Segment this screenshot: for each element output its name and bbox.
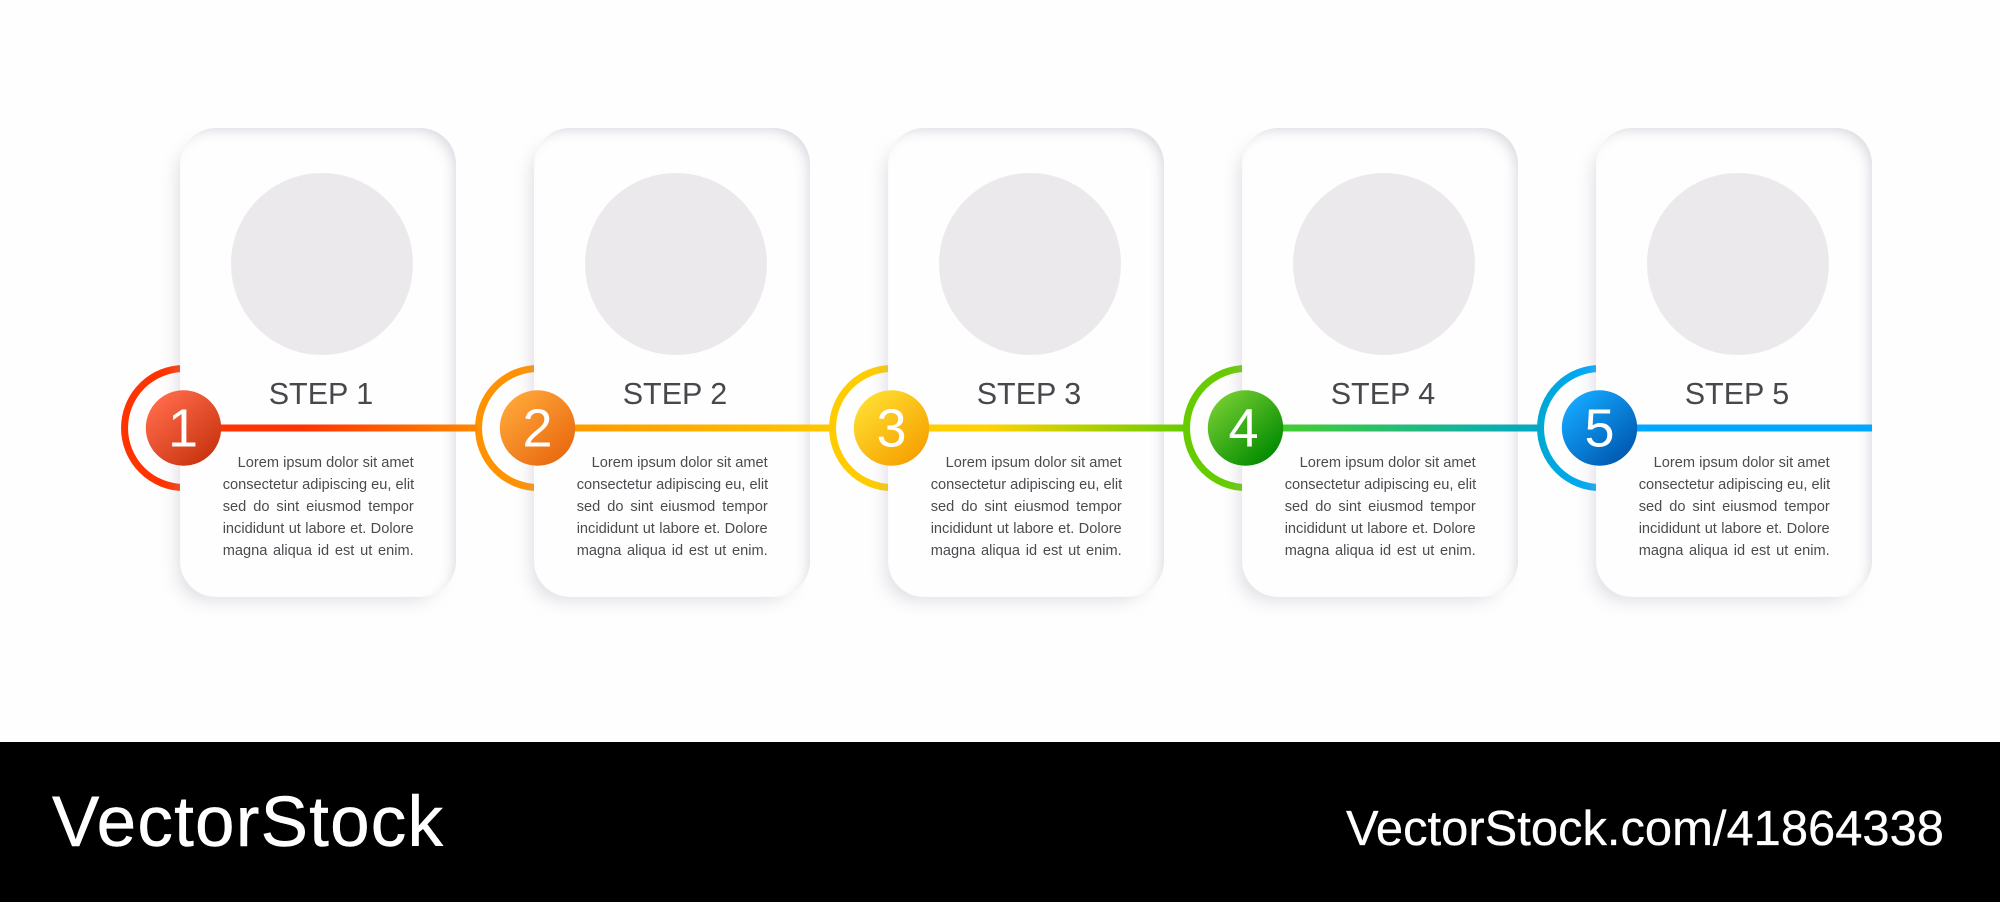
panel: step 2 card — [534, 128, 810, 597]
text block: step 4: incididunt ut labore et. Dolore — [1285, 521, 1476, 537]
text block: step 2 — [577, 454, 768, 559]
text block: step 5 — [1639, 454, 1830, 559]
text block: step 3 — [931, 454, 1122, 559]
text block: step 3: consectetur adipiscing eu, elit — [931, 477, 1122, 493]
text block: step 1: Lorem ipsum dolor sit amet — [238, 454, 414, 470]
marker 2 — [500, 390, 575, 466]
text block: step 5: magna aliqua id est ut enim. — [1639, 543, 1830, 559]
text block: step 5: Lorem ipsum dolor sit amet — [1654, 454, 1830, 470]
text block: step 5: sed do sint eiusmod tempor — [1639, 499, 1830, 515]
text block: step 3: sed do sint eiusmod tempor — [931, 499, 1122, 515]
panel: step 4 card — [1242, 128, 1518, 597]
image placeholder 1 — [230, 172, 412, 354]
marker 1: 1 — [168, 398, 198, 458]
panel: step 5 card — [1596, 128, 1872, 597]
text block: step 2: sed do sint eiusmod tempor — [577, 499, 768, 515]
text block: step 2: consectetur adipiscing eu, elit — [577, 477, 768, 493]
panel: step 3 card — [888, 128, 1164, 597]
marker 3 — [854, 390, 929, 466]
heading: step 5: STEP 5 — [1685, 377, 1789, 411]
text block: step 2: incididunt ut labore et. Dolore — [577, 521, 768, 537]
text block: step 4: sed do sint eiusmod tempor — [1285, 499, 1476, 515]
text block: step 1: consectetur adipiscing eu, elit — [223, 477, 414, 493]
marker 5 — [1562, 390, 1637, 466]
marker 4 — [1208, 390, 1283, 466]
image placeholder 4 — [1292, 172, 1474, 354]
panel: step 1 card — [180, 128, 456, 597]
marker 3: 3 — [876, 398, 907, 458]
text block: step 2: Lorem ipsum dolor sit amet — [592, 454, 768, 470]
connector line — [215, 424, 1872, 432]
text block: step 3: incididunt ut labore et. Dolore — [931, 521, 1122, 537]
marker 5: 5 — [1584, 398, 1615, 458]
text block: step 4: Lorem ipsum dolor sit amet — [1300, 454, 1476, 470]
image placeholder 2 — [584, 172, 766, 354]
image placeholder 5 — [1646, 172, 1828, 354]
heading: step 1: STEP 1 — [269, 377, 373, 411]
text block: step 4: consectetur adipiscing eu, elit — [1285, 477, 1476, 493]
wordmark: VectorStock — [52, 783, 444, 862]
text block: step 5: consectetur adipiscing eu, elit — [1639, 477, 1830, 493]
text block: step 5: incididunt ut labore et. Dolore — [1639, 521, 1830, 537]
text block: step 1: sed do sint eiusmod tempor — [223, 499, 414, 515]
heading: step 2: STEP 2 — [623, 377, 727, 411]
text block: step 1: incididunt ut labore et. Dolore — [223, 521, 414, 537]
marker 4: 4 — [1228, 398, 1259, 458]
text block: step 3: Lorem ipsum dolor sit amet — [946, 454, 1122, 470]
image placeholder 3 — [938, 172, 1120, 354]
marker 1 — [146, 390, 221, 466]
text block: step 4 — [1285, 454, 1476, 559]
text block: step 2: magna aliqua id est ut enim. — [577, 543, 768, 559]
heading: step 3: STEP 3 — [977, 377, 1081, 411]
text block: step 3: magna aliqua id est ut enim. — [931, 543, 1122, 559]
text block: step 4: magna aliqua id est ut enim. — [1285, 543, 1476, 559]
heading: step 4: STEP 4 — [1331, 377, 1435, 411]
text block: step 1 — [223, 454, 414, 559]
image id url: VectorStock.com/41864338 — [1346, 802, 1944, 856]
text block: step 1: magna aliqua id est ut enim. — [223, 543, 414, 559]
marker 2: 2 — [522, 398, 553, 458]
